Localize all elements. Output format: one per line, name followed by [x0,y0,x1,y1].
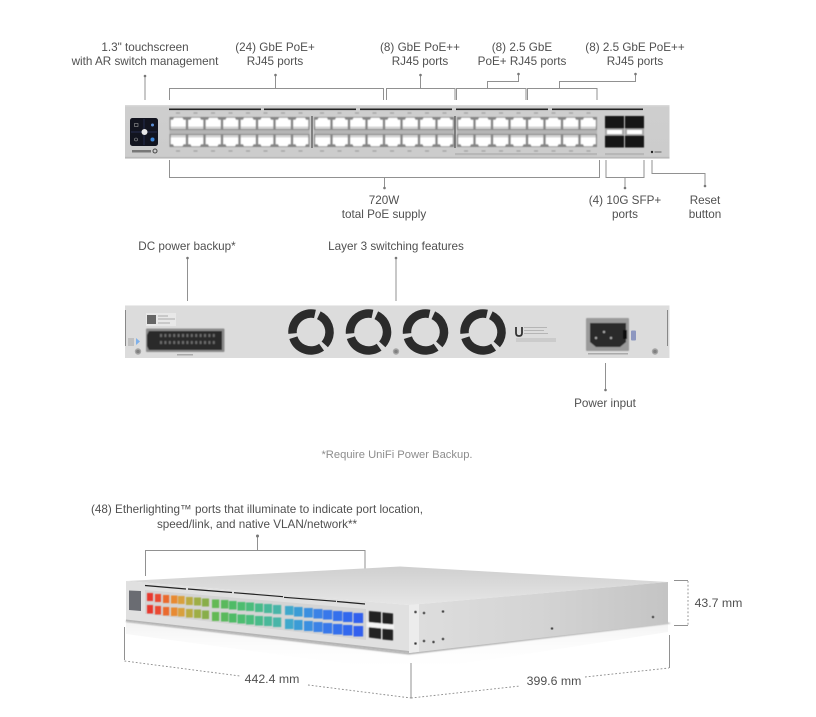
bottom leader arrows [170,160,706,189]
label: SFP+ ports: ports [612,208,638,221]
front face [126,581,409,653]
device reflection [126,621,668,672]
dimension: height: 43.7 mm [695,596,742,610]
fan 1 [286,307,336,357]
label: GbE PoE+ ports: (24) GbE PoE+ [235,41,315,54]
label: GbE PoE+ ports: RJ45 ports [247,55,303,68]
label: reset button [689,194,721,221]
brand mark [132,149,157,153]
left markings [128,338,140,346]
dimension: depth: 399.6 mm [527,674,581,688]
dimension: height [674,580,742,626]
rack ear [409,604,419,653]
status strips [455,153,644,155]
dimension: width: 442.4 mm [245,672,299,686]
AC power inlet [586,318,629,351]
group dividers [312,116,456,148]
RJ45 port group 1 to 16 [170,117,310,147]
label: SFP+ ports [589,194,661,221]
fan 2 [344,307,393,357]
colored ports row 1 [147,593,363,623]
label: DC power backup: DC power backup* [138,240,236,253]
touchscreen [129,590,141,611]
label: SFP+ ports: (4) 10G SFP+ [589,194,661,207]
rating text [177,354,193,356]
label: touchscreen: with AR switch management [71,55,219,68]
label: Etherlighting [91,503,423,531]
screws [135,348,658,355]
label: GbE PoE++ ports: (8) GbE PoE++ [380,41,460,54]
label: GbE PoE++ ports [380,41,460,68]
port number ticks [176,113,597,151]
label: GbE PoE++ ports: RJ45 ports [392,55,448,68]
touchscreen [130,118,158,146]
port background [145,590,366,640]
SFP+ ports [367,611,394,640]
label: 2.5 GbE PoE+ ports: PoE+ RJ45 ports [478,55,566,68]
dimension: depth [411,635,670,698]
RJ45 port group 33 to 48 [457,117,597,147]
top face [126,566,668,605]
DC backup connector [146,328,224,352]
front panel [125,105,670,158]
device shadow [126,620,671,654]
top port guide bars [169,108,643,110]
compliance text [516,327,556,342]
label: touchscreen: 1.3" touchscreen [101,41,189,54]
rating strip [588,353,628,354]
colored ports row 2 [147,605,363,636]
label: Etherlighting: (48) Etherlighting™ ports that illuminate to indicate port location, [91,503,423,516]
footnote: *Require UniFi Power Backup. [321,449,473,461]
label: total PoE [342,194,426,221]
QR label [146,313,176,326]
rear leader arrows [186,257,607,391]
right side [409,582,668,653]
RJ45 port group 17 to 32 [314,117,454,147]
perspective guide bars [145,586,365,604]
label: 2.5 GbE PoE++ ports [585,41,685,68]
label: GbE PoE+ ports [235,41,315,68]
label: reset button: Reset [690,194,721,207]
label: Layer 3 switching: Layer 3 switching features [328,240,464,253]
label: total PoE: total PoE supply [342,208,426,221]
fan 3 [401,307,450,357]
top leader arrows [144,73,637,100]
reset pinhole [651,151,662,153]
label: total PoE: 720W [369,194,399,207]
power latch [631,330,636,340]
label: 2.5 GbE PoE++ ports: (8) 2.5 GbE PoE++ [585,41,685,54]
fan 4 [458,307,508,357]
label: touchscreen [71,41,219,68]
label: 2.5 GbE PoE+ ports [478,41,566,68]
dimension: width [124,627,411,698]
Etherlighting bracket [146,534,365,605]
SFP+ ports [605,116,644,148]
label: 2.5 GbE PoE+ ports: (8) 2.5 GbE [492,41,552,54]
label: 2.5 GbE PoE++ ports: RJ45 ports [607,55,663,68]
Ubiquiti logo [516,327,522,336]
label: Etherlighting: speed/link, and native VLAN/network** [157,518,357,531]
device: perspective view [126,566,668,653]
label: power input: Power input [574,397,637,410]
label: reset button: button [689,208,721,221]
rear panel [125,305,670,358]
side screw holes [414,610,654,645]
